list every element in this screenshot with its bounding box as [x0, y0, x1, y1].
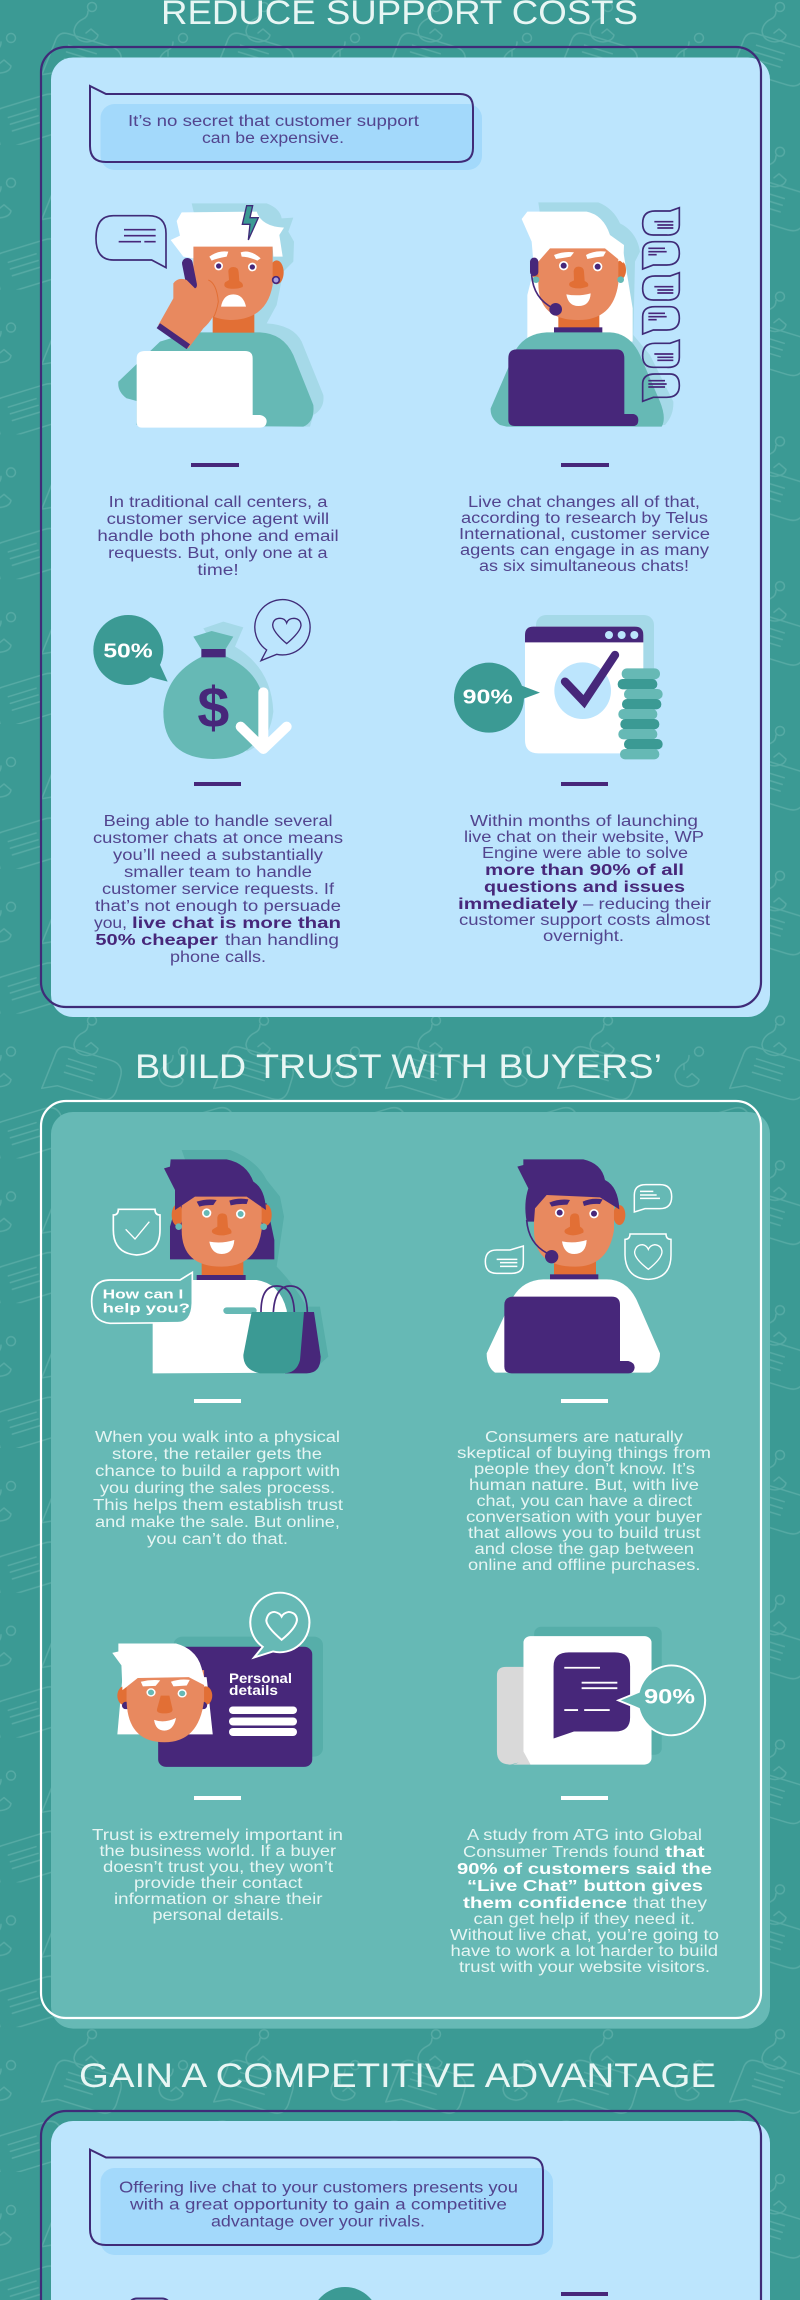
text: ATG study 90%: trust with your website visitors. [459, 1959, 710, 1976]
text: handling several chats: Being able to handle several [104, 813, 333, 830]
text: trust is extremely important: the business world. If a buyer [100, 1843, 336, 1860]
callout: competitive advantage: with a great opportunity to gain a competitive [129, 2197, 507, 2214]
text: traditional call centers: handle both phone and email [97, 528, 339, 545]
illustration: personal details card: Personal [229, 1670, 292, 1686]
text: handling several chats: customer chats at once means [93, 830, 343, 847]
text: physical store rapport: chance to build a rapport with [95, 1463, 340, 1480]
text: traditional call centers: customer service agent will [107, 511, 329, 528]
text: trust is extremely important: personal details. [152, 1907, 284, 1924]
text: handling several chats: that’s not enough to persuade [95, 898, 341, 915]
text: ATG study 90%: “Live Chat” button gives [467, 1878, 703, 1895]
text: physical store rapport: When you walk into a physical [95, 1429, 340, 1446]
callout: support can be expensive: can be expensive. [202, 130, 344, 147]
text: WP Engine 90%: questions and issues [484, 879, 685, 896]
text: live chat changes all of that: Live chat changes all of that, [468, 494, 700, 511]
divider row 3 [194, 1399, 608, 1403]
illustration: money bag down 50%: 50% [103, 640, 153, 663]
text: handling several chats: phone calls. [170, 949, 266, 966]
text: ATG study 90% [450, 1827, 719, 1976]
illustration: personal details card: details [229, 1682, 278, 1698]
text: consumers are skeptical: human nature. But, with live [469, 1477, 699, 1494]
illustration: money bag down 50% [93, 600, 310, 759]
text: consumers are skeptical [457, 1429, 711, 1574]
text: trust is extremely important: Trust is extremely important in [92, 1827, 343, 1844]
callout: competitive advantage: advantage over your rivals. [211, 2213, 425, 2230]
text: handling several chats [93, 813, 343, 966]
text: consumers are skeptical: online and offline purchases. [468, 1557, 700, 1574]
text: consumers are skeptical: conversation with your buyer [466, 1509, 702, 1526]
text: ATG study 90%: A study from ATG into Global [467, 1827, 702, 1844]
text: WP Engine 90%: – reducing their [583, 896, 711, 913]
divider row 4 [194, 1796, 608, 1800]
text: ATG study 90%: have to work a lot harder to build [450, 1943, 718, 1960]
text: physical store rapport: This helps them establish trust [93, 1497, 344, 1514]
text: handling several chats: smaller team to handle [124, 864, 312, 881]
text: consumers are skeptical: skeptical of buying things from [457, 1445, 711, 1462]
text: trust is extremely important: doesn’t trust you, they won’t [103, 1859, 334, 1876]
illustration: stressed agent on the phone [96, 203, 324, 428]
callout: support can be expensive: It’s no secret that customer support [128, 113, 420, 130]
text: physical store rapport [93, 1429, 344, 1548]
panel: gain a competitive advantage [41, 2111, 770, 2300]
text: WP Engine 90%: Engine were able to solve [482, 845, 688, 862]
text: physical store rapport: and make the sale. But online, [95, 1514, 340, 1531]
text: physical store rapport: you during the sales process. [100, 1480, 335, 1497]
panel: build trust with buyers [41, 1101, 770, 2029]
illustration: shop assistant with shopping bag: help you? [103, 1301, 190, 1316]
text: live chat changes all of that: according to research by Telus [461, 510, 708, 527]
text: trust is extremely important [92, 1827, 343, 1924]
text: WP Engine 90%: customer support costs almost [459, 912, 711, 929]
divider row 5 [561, 2292, 608, 2296]
text: WP Engine 90%: more than 90% of all [485, 862, 684, 879]
text: ATG study 90%: Without live chat, you’re going to [450, 1927, 719, 1944]
text: live chat changes all of that: agents can engage in as many [460, 542, 709, 559]
divider row 2 [194, 782, 608, 786]
heading: gain a competitive advantage: GAIN A COMPETITIVE ADVANTAGE [79, 2057, 716, 2095]
text: ATG study 90%: them confidence [463, 1895, 627, 1912]
text: WP Engine 90%: overnight. [543, 928, 624, 945]
text: WP Engine 90%: live chat on their website, WP [464, 829, 704, 846]
callout: support can be expensive [90, 86, 482, 170]
text: ATG study 90%: 90% of customers said the [457, 1861, 712, 1878]
text: consumers are skeptical: people they don’t know. It’s [474, 1461, 695, 1478]
heading: build trust with buyers: BUILD TRUST WITH BUYERS’ [135, 1048, 662, 1086]
illustration: document with chat and 90%: 90% [644, 1686, 695, 1708]
text: live chat changes all of that [459, 494, 710, 575]
text: trust is extremely important: provide their contact [134, 1875, 303, 1892]
text: traditional call centers: requests. But, only one at a [108, 545, 328, 562]
illustration: happy agent with headset and six chats [491, 202, 679, 427]
illustration: personal details card [112, 1593, 323, 1767]
text: live chat changes all of that: International, customer service [459, 526, 710, 543]
callout: competitive advantage: Offering live chat to your customers presents you [119, 2179, 518, 2196]
text: handling several chats: than handling [225, 932, 339, 949]
text: physical store rapport: you can’t do that. [147, 1531, 288, 1548]
illustration: document with chat and 90% [497, 1627, 705, 1765]
text: ATG study 90%: Consumer Trends found [463, 1844, 659, 1861]
text: handling several chats: you’ll need a substantially [113, 847, 323, 864]
icon: partial teal badge [311, 2287, 379, 2300]
text: consumers are skeptical: chat, you can have a direct [476, 1493, 693, 1510]
illustration: shop assistant with shopping bag: How can I [103, 1286, 183, 1301]
illustration: shop assistant with shopping bag [92, 1150, 328, 1373]
text: WP Engine 90% [458, 813, 711, 945]
illustration: browser window with check and 90%: 90% [463, 686, 513, 709]
illustration: money bag down 50%: $ [197, 676, 229, 740]
text: ATG study 90%: that [665, 1844, 705, 1861]
text: ATG study 90%: that they [633, 1895, 707, 1912]
text: trust is extremely important: information or share their [114, 1891, 322, 1908]
text: live chat changes all of that: as six simultaneous chats! [479, 558, 689, 575]
text: consumers are skeptical: and close the gap between [474, 1541, 694, 1558]
text: WP Engine 90%: immediately [458, 896, 578, 913]
text: traditional call centers: In traditional call centers, a [109, 494, 328, 511]
icon: partial chat bubble [128, 2298, 171, 2300]
text: ATG study 90%: can get help if they need it. [474, 1911, 695, 1928]
text: consumers are skeptical: that allows you to build trust [468, 1525, 701, 1542]
text: traditional call centers [97, 494, 339, 579]
text: physical store rapport: store, the retailer gets the [112, 1446, 322, 1463]
text: WP Engine 90%: Within months of launching [470, 813, 698, 830]
text: traditional call centers: time! [197, 562, 239, 579]
panel: reduce support costs [41, 47, 770, 1017]
illustration: browser window with check and 90% [454, 615, 663, 759]
text: consumers are skeptical: Consumers are naturally [485, 1429, 683, 1446]
callout: competitive advantage [90, 2150, 553, 2255]
text: handling several chats: you, [94, 915, 127, 932]
text: handling several chats: live chat is more than [132, 915, 341, 932]
text: handling several chats: customer service requests. If [102, 881, 335, 898]
text: handling several chats: 50% cheaper [95, 932, 218, 949]
divider row 1 [191, 463, 609, 467]
illustration: agent building trust with headset [485, 1159, 672, 1373]
